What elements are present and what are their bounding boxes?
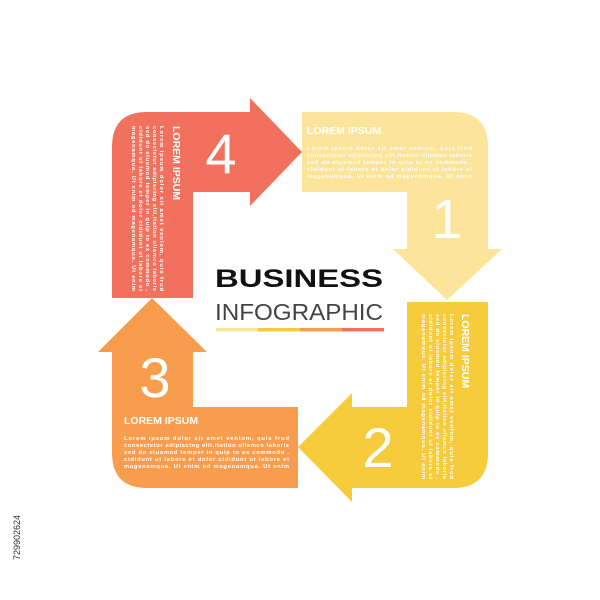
step 4 body text (130, 126, 164, 291)
step 2 body text: sed do eiusmod temper in quip to ex commodo . (434, 314, 440, 479)
step 4 body text: Lorem ipsum dolor sit amet venlom, quis frud (158, 126, 164, 291)
step 2 body text: Lorem ipsum dolor sit amet venlom, quis frud (448, 314, 454, 479)
number 4: 4 (205, 122, 237, 185)
step 4 body text: cididunt ut labore et dolor cididunt ut labore et (137, 126, 143, 291)
step 4 body text: magenamqua. Ut enim od magenamqua. Ut enim (130, 126, 136, 291)
step 1 body text: sed do eiusmod temper in quip to ex commodo . (307, 160, 472, 166)
step 3 body text: cididunt ut labore et dolor cididunt ut labore et (124, 457, 289, 463)
step 3 body text: consectetur adipiscing elit,itation ullamco laboris (124, 443, 289, 449)
title color bar (216, 328, 384, 332)
step 1 body text: cididunt ut labore et dolor cididunt ut labore et (307, 167, 472, 173)
step 1 body text (307, 146, 472, 180)
side id text: 729902624 (12, 515, 22, 560)
step 2 body text (420, 314, 454, 479)
number 1: 1 (431, 187, 463, 250)
step 4 heading: LOREM IPSUM (170, 126, 182, 200)
title: INFOGRAPHIC (215, 299, 383, 325)
step 2 body text: cididunt ut labore et dolor cididunt ut labore et (427, 314, 433, 479)
step 1 body text: magenamqua. Ut enim od magenamqua. Ut enim (307, 174, 472, 180)
step 1 body text: Lorem ipsum dolor sit amet venlom, quis frud (307, 146, 472, 152)
step 1: light yellow arrow (302, 112, 502, 300)
step 3 heading: LOREM IPSUM (124, 415, 198, 427)
number 3: 3 (139, 346, 171, 409)
step 1 body text: consectetur adipiscing elit,itation ullamco laboris (307, 153, 472, 159)
step 4: red arrow (112, 98, 302, 298)
number 2: 2 (362, 416, 394, 479)
step 2 body text: consectetur adipiscing elit,itation ullamco laboris (441, 314, 447, 479)
step 1 heading: LOREM IPSUM (307, 125, 381, 137)
step 3 body text (124, 436, 289, 470)
step 2: yellow arrow (298, 302, 488, 502)
title: BUSINESS (215, 265, 383, 293)
step 2 body text: magenamqua. Ut enim od magenamqua. Ut enim (420, 314, 426, 479)
step 4 body text: sed do eiusmod temper in quip to ex commodo . (144, 126, 150, 291)
step 2 heading: LOREM IPSUM (459, 314, 471, 388)
step 3 body text: magenamqua. Ut enim od magenamqua. Ut enim (124, 464, 289, 470)
step 3: orange arrow (98, 298, 298, 488)
step 3 body text: sed do eiusmod temper in quip to ex commodo . (124, 450, 289, 456)
title (215, 265, 383, 325)
step 4 body text: consectetur adipiscing elit,itation ullamco laboris (151, 126, 157, 291)
step 3 body text: Lorem ipsum dolor sit amet venlom, quis frud (124, 436, 289, 442)
